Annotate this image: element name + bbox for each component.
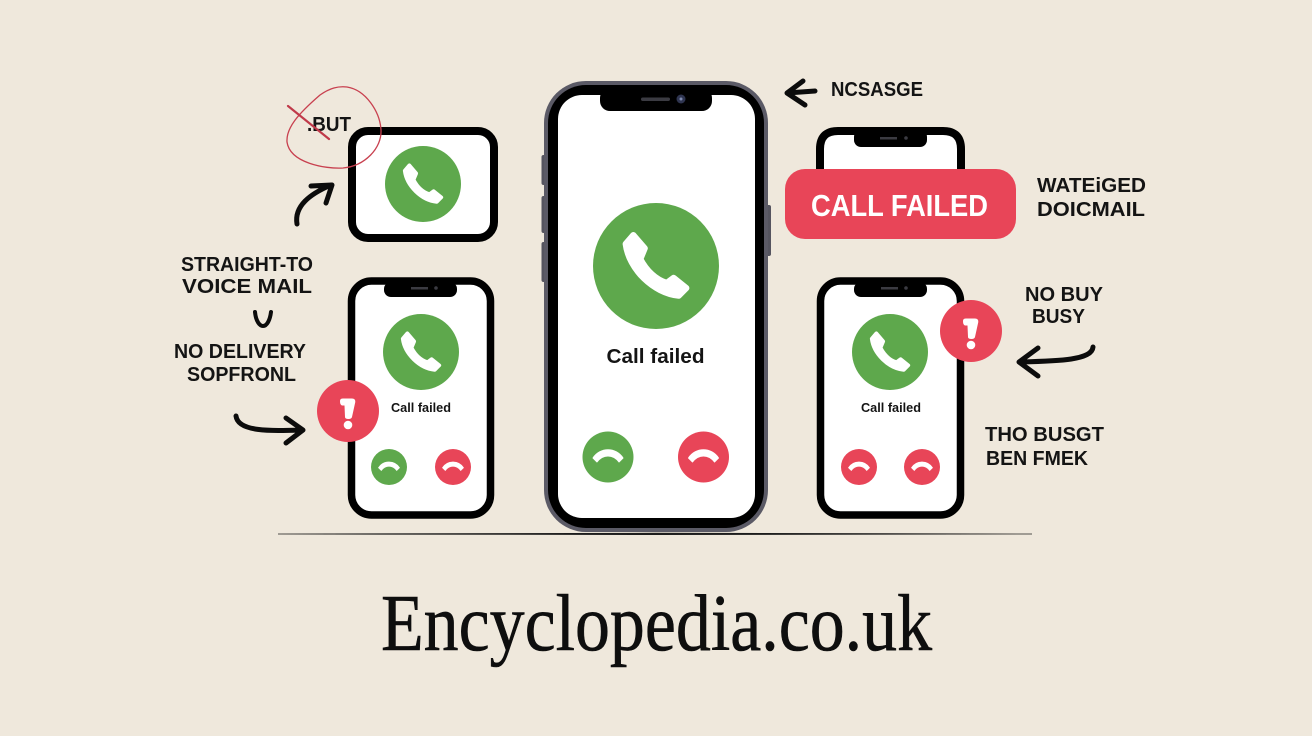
text: no buy busy: BUSY xyxy=(1032,306,1086,328)
title: Encyclopedia.co.uk xyxy=(381,580,932,668)
arrow: to right alert xyxy=(1019,347,1093,376)
text: straight-to voice mail: STRAIGHT-TO xyxy=(181,254,313,276)
call failed banner xyxy=(785,169,1016,239)
text: straight-to voice mail: VOICE MAIL xyxy=(182,276,312,298)
icon: red button left xyxy=(841,449,877,485)
phone body xyxy=(820,281,960,515)
phone body xyxy=(544,81,768,532)
text: tho busgt ben fmek: THO BUSGT xyxy=(985,424,1104,446)
icon: green call button xyxy=(371,449,407,485)
icon: green phone circle xyxy=(385,146,461,222)
panel: bottom left phone xyxy=(317,281,490,515)
phone body xyxy=(820,131,961,175)
icon: green phone circle xyxy=(383,314,459,390)
icon: green phone circle xyxy=(593,203,719,329)
label: ncsasge: NCSASGE xyxy=(831,79,923,101)
status text: Call failed xyxy=(391,401,451,415)
ground line xyxy=(278,533,1032,535)
icon: green phone circle xyxy=(852,314,928,390)
red scribble circle xyxy=(287,87,381,168)
panel: central phone xyxy=(542,81,771,532)
text: tho busgt ben fmek: BEN FMEK xyxy=(986,448,1089,470)
label: BUT: .BUT xyxy=(307,114,351,136)
notch xyxy=(854,130,927,147)
icon: red hang up button xyxy=(435,449,471,485)
text: no delivery xyxy=(174,341,307,386)
text: no delivery: SOPFRONL xyxy=(187,364,296,386)
text: no delivery: NO DELIVERY xyxy=(174,341,307,363)
icon: alert badge xyxy=(317,380,379,442)
icon: red hang up button xyxy=(678,432,729,482)
call failed banner: CALL FAILED xyxy=(811,189,988,223)
notch xyxy=(854,282,927,297)
text: no buy busy: NO BUY xyxy=(1025,284,1104,306)
status text: Call failed xyxy=(861,401,921,415)
arrow: to left alert xyxy=(236,416,303,443)
panel: top right phone with banner xyxy=(785,130,1016,239)
text: wateiged doicmail: WATEiGED xyxy=(1037,175,1146,197)
text: wateiged doicmail: DOICMAIL xyxy=(1037,199,1145,221)
phone body xyxy=(352,281,490,515)
notch xyxy=(384,282,457,297)
panel: bottom right phone xyxy=(820,281,1002,515)
notch xyxy=(600,88,712,111)
icon: green call button xyxy=(582,432,634,482)
text: straight-to voice mail xyxy=(181,254,313,298)
icon: alert badge xyxy=(940,300,1002,362)
panel: landscape phone top left xyxy=(352,131,494,238)
small curved mark xyxy=(255,312,271,326)
status text: Call failed xyxy=(606,346,704,368)
text: tho busgt ben fmek xyxy=(985,424,1104,470)
phone body xyxy=(352,131,494,238)
arrow: left to message xyxy=(787,81,815,105)
red strike line xyxy=(288,106,329,139)
icon: red button right xyxy=(904,449,940,485)
side buttons xyxy=(542,155,771,282)
text: wateiged doicmail xyxy=(1037,175,1146,221)
arrow: up to landscape phone xyxy=(297,185,332,224)
text: no buy busy xyxy=(1025,284,1104,328)
